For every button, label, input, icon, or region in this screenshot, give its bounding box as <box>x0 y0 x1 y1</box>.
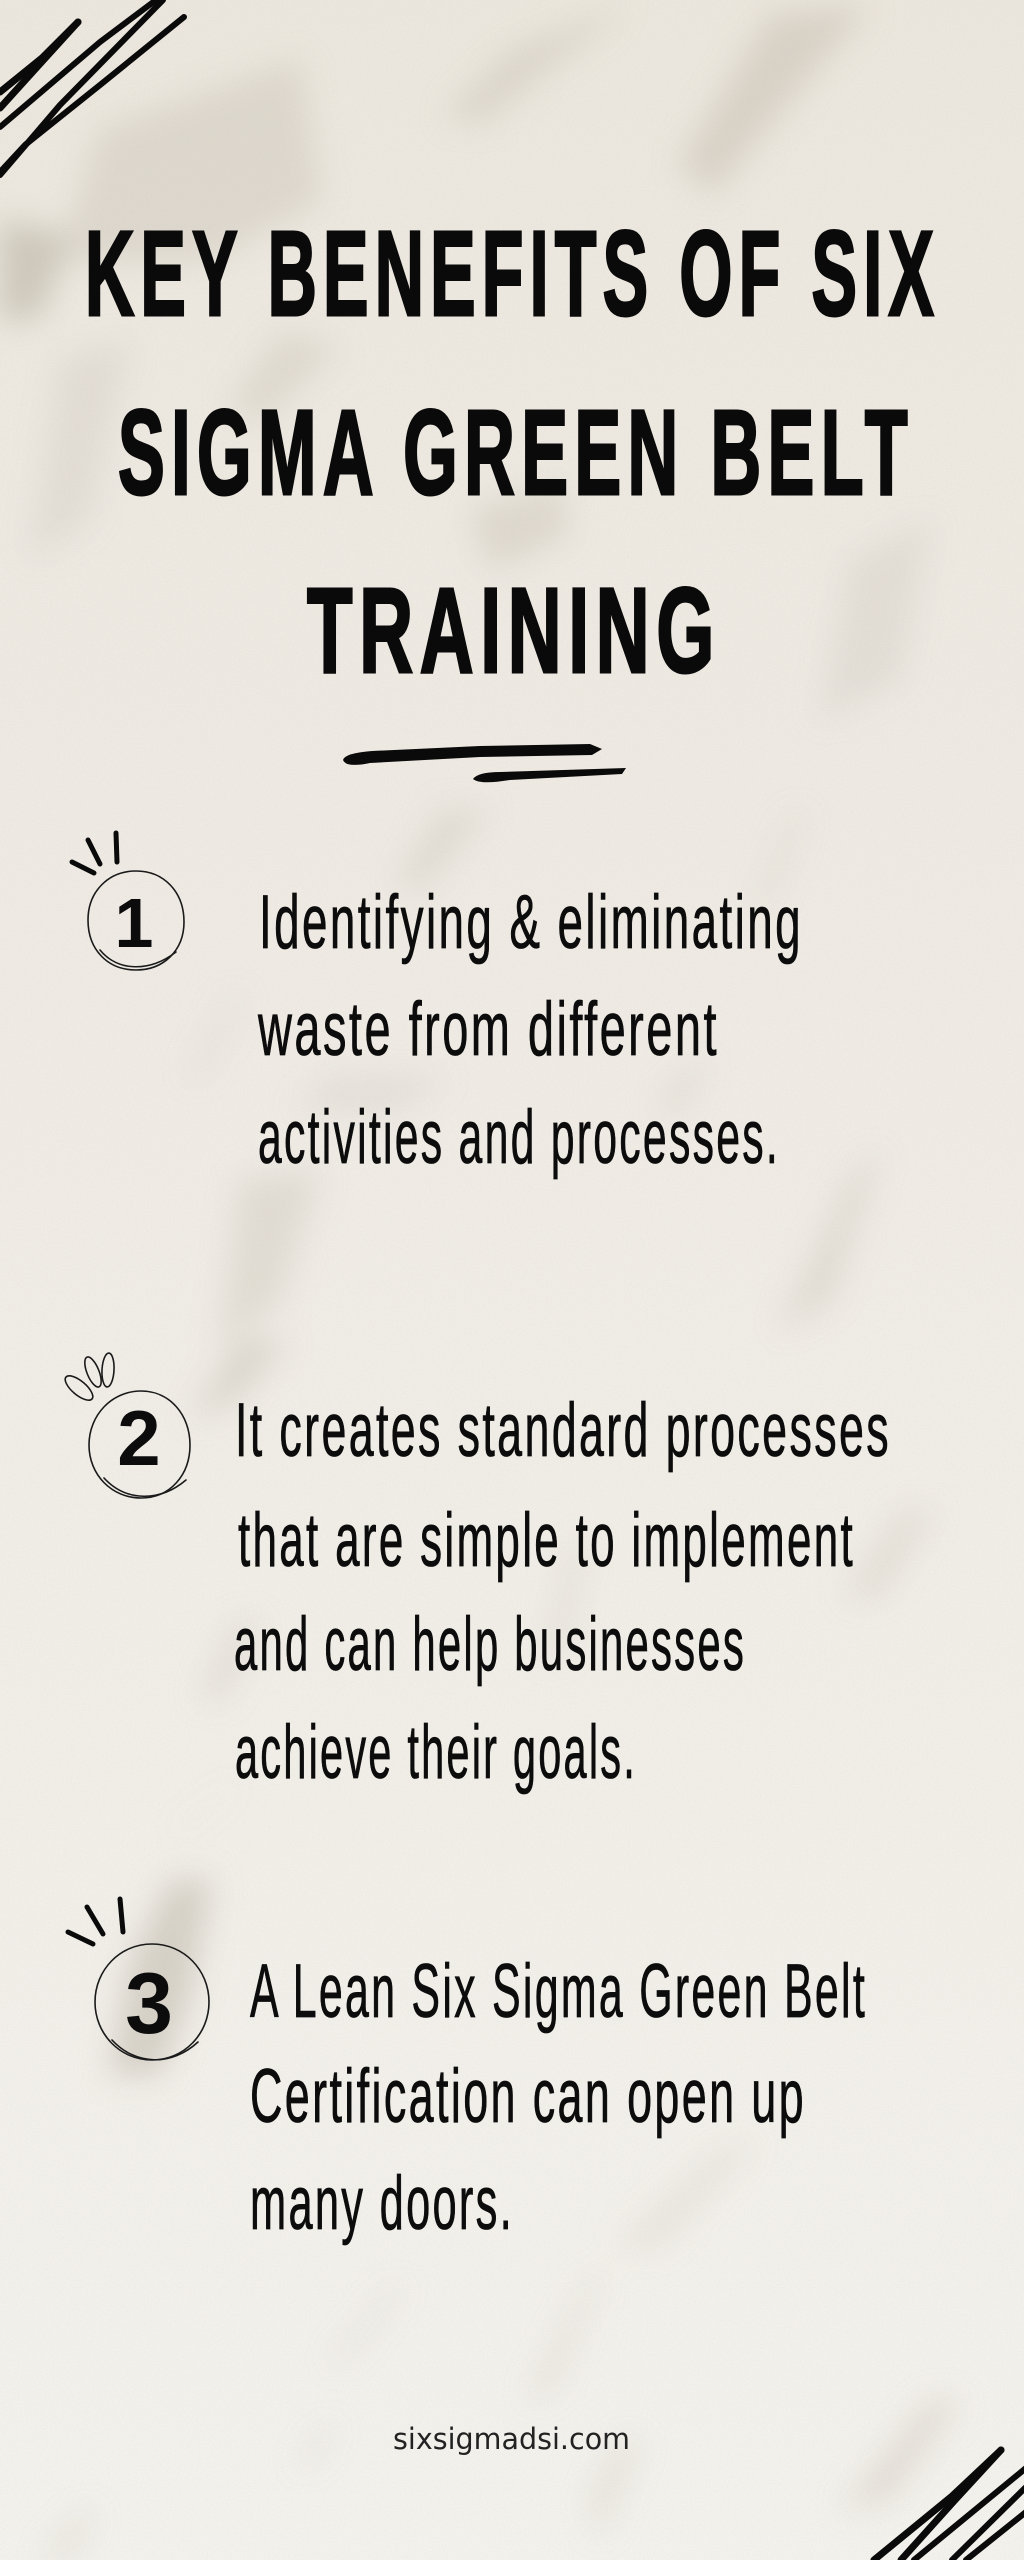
text: item 2 <box>234 1388 891 1795</box>
number badge 3 <box>95 1944 209 2060</box>
text: item 2: achieve their goals. <box>235 1710 637 1795</box>
text: item 3: many doors. <box>250 2161 514 2246</box>
decoration: bottom-right scratch lines <box>874 2450 1024 2560</box>
title <box>85 205 940 698</box>
item 1 <box>72 833 803 1180</box>
icon: sparks 1 <box>72 833 117 873</box>
text: item 3 <box>250 1949 867 2246</box>
title underline brush strokes <box>343 744 626 782</box>
decoration: top-left scratch lines <box>0 0 184 175</box>
number badge 2 <box>89 1391 190 1498</box>
item 3 <box>68 1899 867 2246</box>
number badge 1 <box>88 871 184 970</box>
item 2 <box>61 1353 891 1795</box>
title: TRAINING <box>307 562 721 698</box>
number badge 1: 1 <box>115 884 153 962</box>
number badge 3: 3 <box>125 1956 173 2052</box>
text: item 1: waste from different <box>257 987 719 1072</box>
icon: petals 2 <box>61 1353 115 1404</box>
icon: sparks 3 <box>68 1899 123 1944</box>
number badge 2: 2 <box>117 1394 161 1482</box>
footer website: sixsigmadsi.com <box>393 2422 630 2456</box>
text: item 1 <box>257 880 803 1180</box>
